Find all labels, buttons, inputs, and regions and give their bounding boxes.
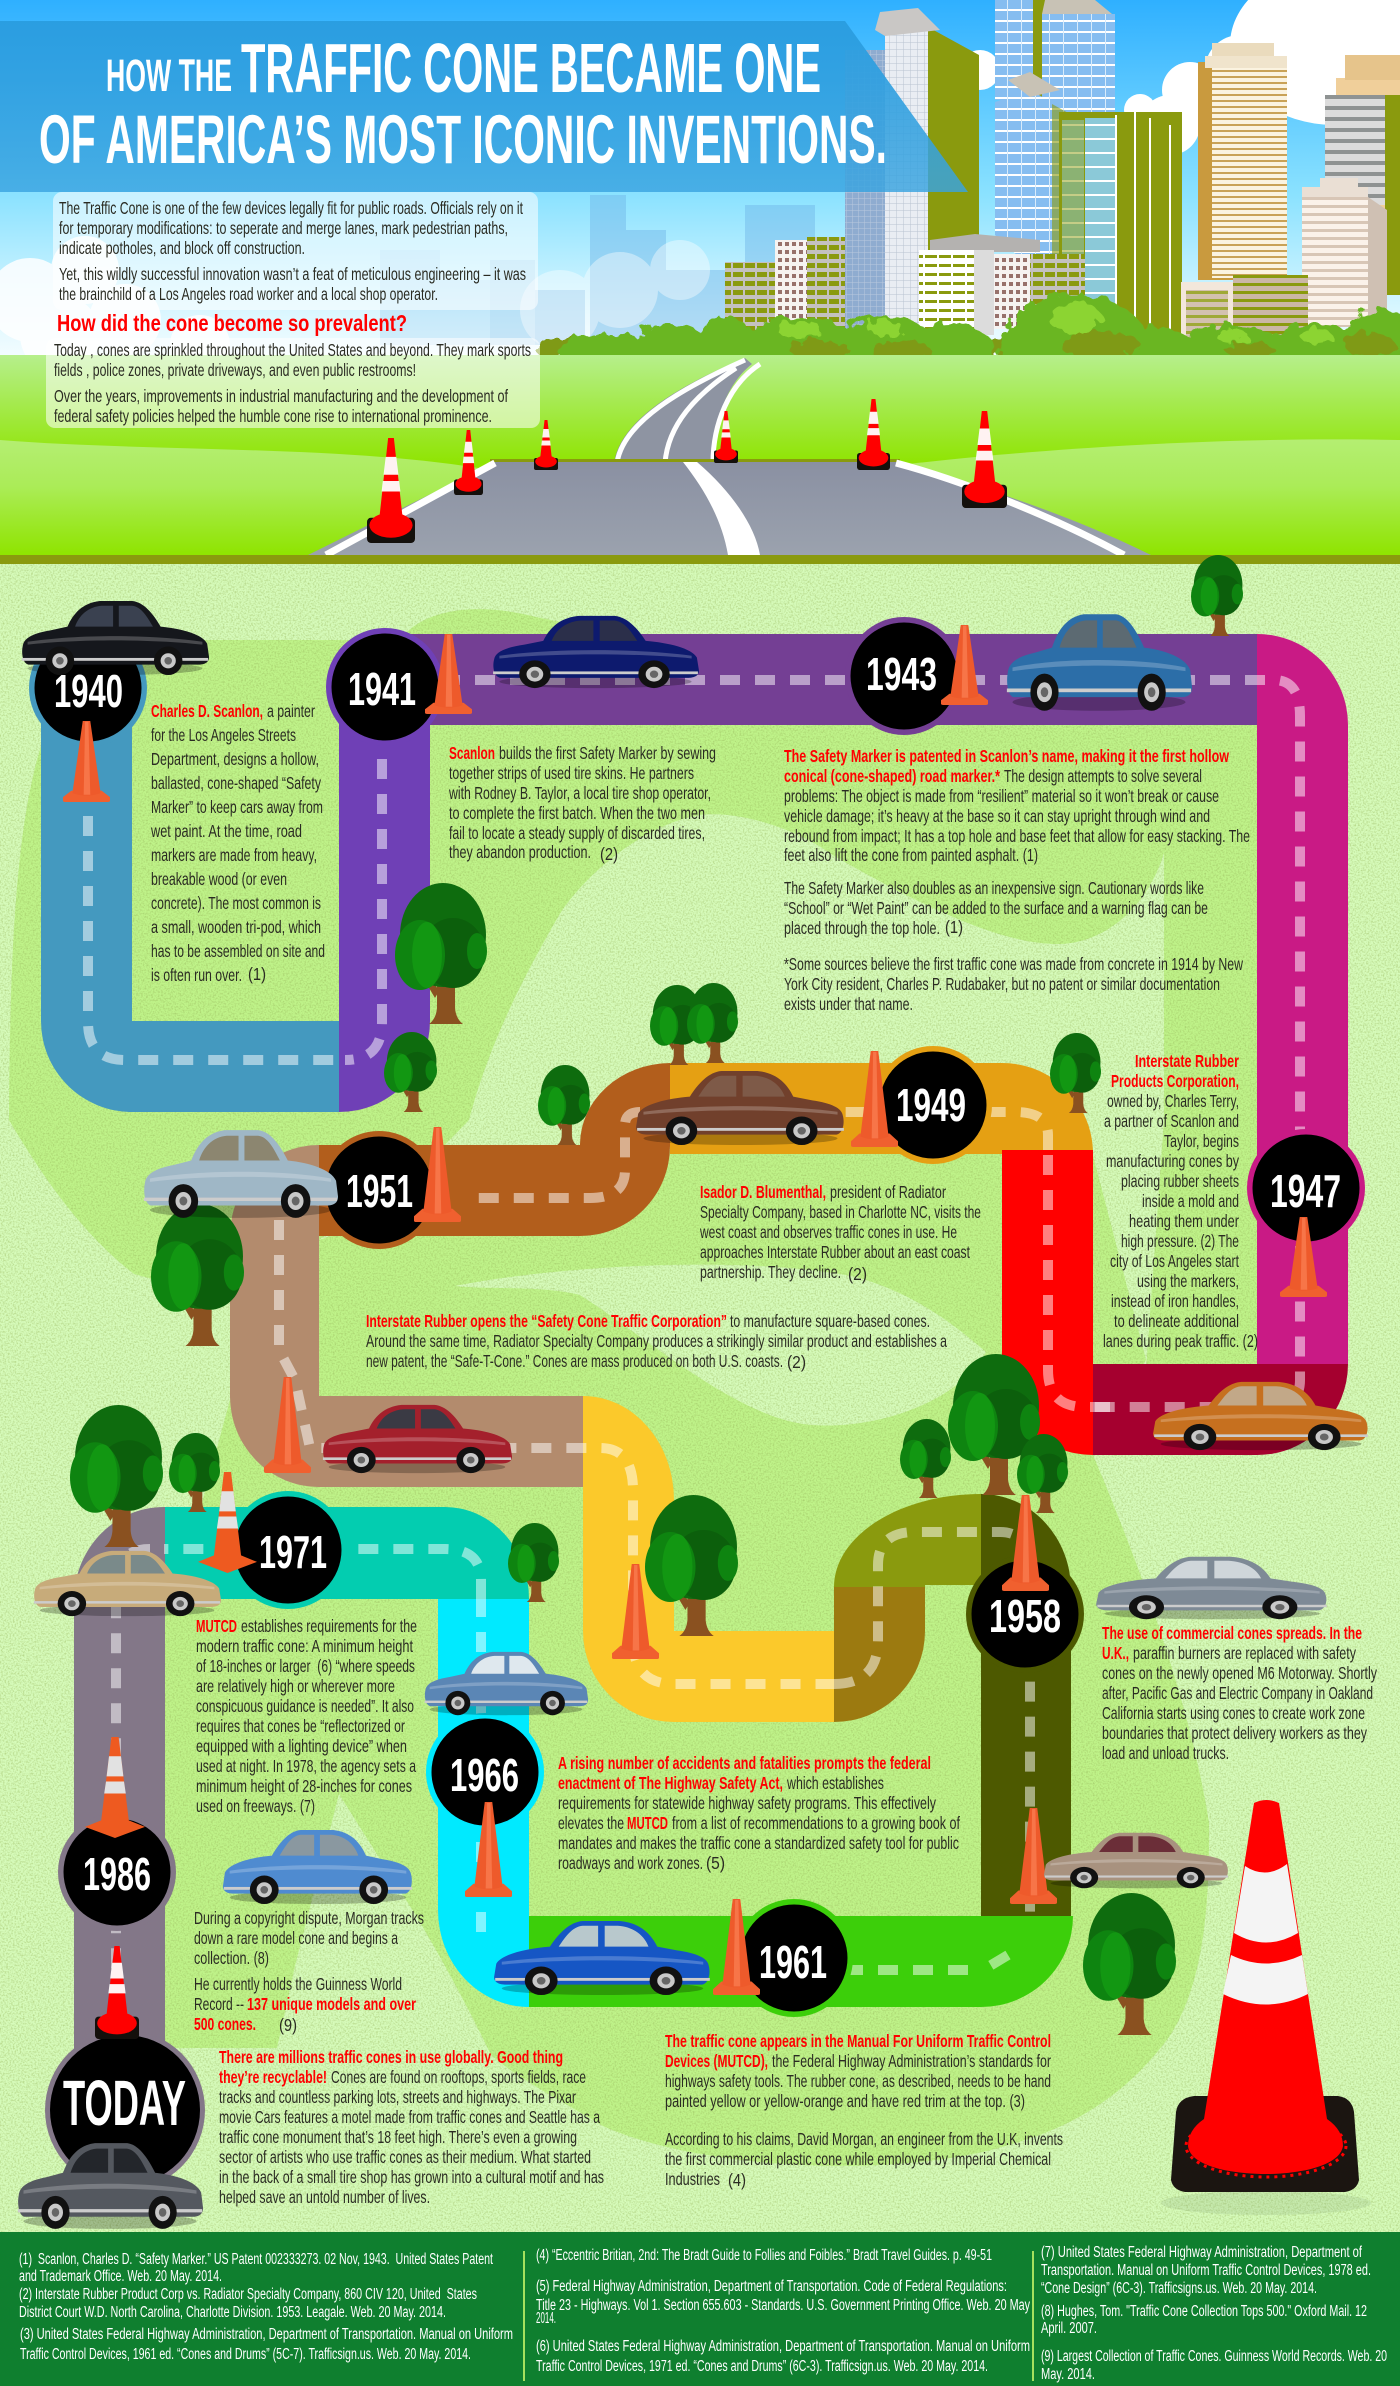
text: today millions of cones: in the back of a small tire shop has grown into a cultural motif and has: [219, 2167, 604, 2187]
road: 1951 segment: [319, 1063, 670, 1236]
car: 1951 light blue sedan: [144, 1130, 338, 1218]
text: 1961 Manual for Uniform Traffic Control Devices: the Federal Highway Administration’s standards for: [772, 2051, 1051, 2071]
text: 1943 Safety Marker patent: “School” or “Wet Paint” can be added to the surface and a warning flag can be: [784, 898, 1208, 918]
references column 1: [19, 2251, 513, 2363]
striped cone: 1986: [85, 1737, 145, 1838]
text: 1941 Scanlon builds: Scanlon: [449, 743, 495, 763]
references column 1: and Trademark Office. Web. 20 May. 2014.: [19, 2268, 222, 2285]
text: 1947 Interstate Rubber Products: placing rubber sheets: [1121, 1171, 1239, 1191]
text: 1986 Morgan collection: He currently holds the Guinness World: [194, 1974, 402, 1994]
text: 1966 Highway Safety Act: enactment of The Highway Safety Act,: [558, 1773, 783, 1793]
text: 1940 Charles D. Scanlon: has to be assembled on site and: [151, 941, 325, 961]
references column 1: Traffic Control Devices, 1961 ed. “Cones and Drums” (5C-7). Trafficsign.us. Web. 20 May. 2014.: [20, 2346, 471, 2363]
text: 1947 Interstate Rubber Products: Products Corporation,: [1111, 1071, 1239, 1091]
red cone: today: [95, 1946, 139, 2039]
orange cones along the route: [63, 625, 1327, 1995]
intro box 1: the brainchild of a Los Angeles road worker and a local shop operator.: [59, 284, 438, 304]
text: 1941 Scanlon builds: [448, 743, 716, 864]
skyscrapers: [845, 0, 1400, 342]
road: 1966 segment: [438, 1599, 529, 2007]
text: 1949 Isador D. Blumenthal: president of Radiator: [830, 1182, 946, 1202]
year marker: today: TODAY: [63, 2067, 186, 2139]
text: 1940 Charles D. Scanlon: for the Los Angeles Streets: [151, 725, 296, 745]
road: red segment: [1002, 1150, 1093, 1455]
year marker: 1951: [320, 1131, 438, 1249]
text: 1966 Highway Safety Act: (5): [706, 1853, 725, 1873]
text: 1943 Safety Marker patent: (1): [945, 917, 963, 937]
road: 1949 segment: [670, 1063, 1093, 1154]
year marker: 1958: 1958: [989, 1590, 1061, 1642]
intro box 1: [53, 192, 538, 310]
references column 2: Title 23 - Highways. Vol 1. Section 655.603 - Standards. U.S. Government Printing Office. Web. 20 May: [536, 2297, 1030, 2314]
text: 1941 Scanlon builds: with Rodney B. Taylor, a local tire shop operator,: [448, 783, 711, 803]
year marker: 1943: [845, 617, 963, 735]
text: today millions of cones: movie Cars features a motel made from traffic cones and Seattle has a: [219, 2107, 600, 2127]
intro box 1: Yet, this wildly successful innovation wasn’t a feat of meticulous engineering – it was: [59, 264, 526, 284]
text: 1947 Interstate Rubber Products: [1103, 1051, 1258, 1351]
text: 1951 Interstate Rubber opens: new patent, the “Safe-T-Cone.” Cones are mass produced on both U.S. coasts.: [366, 1351, 783, 1371]
text: 1943 Safety Marker patent: exists under that name.: [784, 994, 913, 1014]
big traffic cone: [1161, 1800, 1371, 2215]
road network: [41, 634, 1348, 2130]
text: 1941 Scanlon builds: builds the first Safety Marker by sewing: [499, 743, 716, 763]
text: today millions of cones: sector of artists who use traffic cones as their medium. What started: [219, 2147, 591, 2167]
intro box 1: for temporary modifications: to seperate and merge lanes, mark pedestrian paths,: [59, 218, 508, 238]
text: 1966 Highway Safety Act: from a list of recommendations to a growing book of: [672, 1813, 960, 1833]
year marker: today: [45, 2030, 205, 2190]
text: 1940 Charles D. Scanlon: a painter: [267, 701, 315, 721]
text: 1941 Scanlon builds: together strips of used tire skins. He partners: [449, 763, 694, 783]
text: 1971 MUTCD requirements: of 18-inches or larger (6) “where speeds: [196, 1656, 415, 1676]
clouds: [0, 0, 1400, 375]
text: 1966 Highway Safety Act: roadways and work zones.: [558, 1853, 703, 1873]
text: 1971 MUTCD requirements: minimum height of 28-inches for cones: [196, 1776, 412, 1796]
text: 1943 Safety Marker patent: York City resident, Charles P. Rudabaker, but no patent or similar documentation: [784, 974, 1220, 994]
text: 1971 MUTCD requirements: [196, 1616, 417, 1816]
references column 2: Traffic Control Devices, 1971 ed. “Cones and Drums” (6C-3). Trafficsign.us. Web. 20 May. 2014.: [536, 2358, 988, 2375]
text: 1961 Manual for Uniform Traffic Control Devices: According to his claims, David Morgan, an engineer from the U.K, invents: [665, 2129, 1063, 2149]
year marker: 1958: [966, 1555, 1084, 1673]
text: 1971 MUTCD requirements: requires that cones be “reflectorized or: [196, 1716, 405, 1736]
heading: how did the cone become so prevalent: How did the cone become so prevalent?: [57, 310, 407, 336]
year marker: 1961: [735, 1899, 853, 2017]
footer: references: [0, 2232, 1400, 2386]
text: 1971 MUTCD requirements: modern traffic cone: A minimum height: [196, 1636, 413, 1656]
text: 1940 Charles D. Scanlon: breakable wood (or even: [151, 869, 287, 889]
intro box 2: fields , police zones, private driveways, and even public restrooms!: [54, 360, 416, 380]
grass field: [0, 355, 1400, 555]
text: 1958 commercial cones spread: load and unload trucks.: [1102, 1743, 1229, 1763]
text: 1949 Isador D. Blumenthal: west coast and observes traffic cones in use. He: [699, 1222, 957, 1242]
text: 1947 Interstate Rubber Products: Taylor, begins: [1164, 1131, 1239, 1151]
text: 1986 Morgan collection: down a rare model cone and begins a: [194, 1928, 398, 1948]
text: 1947 Interstate Rubber Products: to delineate additional: [1114, 1311, 1239, 1331]
text: 1949 Isador D. Blumenthal: approaches Interstate Rubber about an east coast: [700, 1242, 970, 1262]
text: 1947 Interstate Rubber Products: a partner of Scanlon and: [1104, 1111, 1239, 1131]
trees: [70, 555, 1243, 2035]
text: today millions of cones: helped save an untold number of lives.: [219, 2187, 430, 2207]
text: 1947 Interstate Rubber Products: heating them under: [1129, 1211, 1239, 1231]
text: 1940 Charles D. Scanlon: Marker” to keep cars away from: [151, 797, 323, 817]
year marker: 1966: 1966: [450, 1749, 519, 1801]
text: 1986 Morgan collection: (9): [279, 2015, 297, 2035]
text: 1971 MUTCD requirements: used at night. In 1978, the agency sets a: [196, 1756, 416, 1776]
text: 1947 Interstate Rubber Products: instead of iron handles,: [1111, 1291, 1239, 1311]
references column 1: (1) Scanlon, Charles D. “Safety Marker.” US Patent 002333273. 02 Nov, 1943. United States Patent: [19, 2251, 493, 2268]
car: today grey sedan: [18, 2143, 203, 2229]
cone base studs: [1186, 2115, 1346, 2177]
road: [308, 358, 1151, 555]
text: 1961 Manual for Uniform Traffic Control Devices: Industries: [665, 2169, 720, 2189]
treeline bushes: [540, 294, 1400, 406]
text: 1966 Highway Safety Act: which establishes: [786, 1773, 884, 1793]
year marker: 1971: 1971: [259, 1526, 327, 1578]
text: 1949 Isador D. Blumenthal: Specialty Company, based in Charlotte NC, visits the: [700, 1202, 981, 1222]
car: 1961 blue impala: [494, 1921, 710, 1995]
year marker: 1941: [326, 628, 444, 746]
text: 1966 Highway Safety Act: MUTCD: [627, 1813, 668, 1833]
sky: [0, 0, 1400, 355]
text: 1986 Morgan collection: [194, 1908, 424, 2035]
text: 1951 Interstate Rubber opens: Around the same time, Radiator Specialty Company produces a strikingly similar product and establishes a: [366, 1331, 947, 1351]
text: 1940 Charles D. Scanlon: concrete). The most common is: [151, 893, 321, 913]
intro box 2: Over the years, improvements in industrial manufacturing and the development of: [54, 386, 508, 406]
road: 1971 segment: [164, 1507, 529, 1599]
cone stripes: [1223, 1864, 1308, 2004]
road: 1943 horizontal segment: [385, 634, 1257, 725]
low buildings: [725, 234, 1308, 350]
text: 1986 Morgan collection: 500 cones.: [194, 2014, 256, 2034]
year marker: 1947: [1247, 1129, 1365, 1247]
car: 1966 blue sedan: [425, 1652, 588, 1715]
text: 1941 Scanlon builds: to complete the first batch. When the two men: [449, 803, 705, 823]
text: 1941 Scanlon builds: fail to locate a steady supply of discarded tires,: [449, 823, 705, 843]
title: [39, 29, 887, 178]
text: 1943 Safety Marker patent: problems: The object is made from “resilient” material so it won’t break or cause: [784, 786, 1219, 806]
year marker: 1986: [58, 1813, 176, 1931]
car: station wagon: [1044, 1833, 1228, 1888]
text: 1971 MUTCD requirements: establishes requirements for the: [241, 1616, 417, 1636]
text: 1947 Interstate Rubber Products: high pressure. (2) The: [1121, 1231, 1239, 1251]
road lane dashes: [88, 680, 1300, 2040]
text: 1949 Isador D. Blumenthal: (2): [848, 1264, 867, 1284]
text: 1966 Highway Safety Act: mandates and makes the traffic cone a standardized safety tool for public: [558, 1833, 959, 1853]
year marker: 1941: 1941: [348, 663, 416, 715]
faint skyline: [380, 195, 815, 345]
text: 1986 Morgan collection: 137 unique models and over: [247, 1994, 416, 2014]
text: 1947 Interstate Rubber Products: manufacturing cones by: [1106, 1151, 1239, 1171]
road: 1941 vertical segment: [339, 687, 430, 1112]
near lawn right: [900, 439, 1400, 555]
title band: [0, 21, 968, 192]
text: 1966 Highway Safety Act: [558, 1753, 960, 1873]
text: 1940 Charles D. Scanlon: (1): [248, 964, 266, 984]
text: 1971 MUTCD requirements: equipped with a lighting device” when: [196, 1736, 407, 1756]
text: 1940 Charles D. Scanlon: Charles D. Scanlon,: [151, 701, 263, 721]
text: today millions of cones: tracks and countless parking lots, streets and highways. The Pixar: [219, 2087, 576, 2107]
text: 1971 MUTCD requirements: are relatively high or wherever more: [196, 1676, 395, 1696]
text: 1943 Safety Marker patent: placed through the top hole.: [784, 918, 940, 938]
references column 2: (4) “Eccentric Britian, 2nd: The Bradt Guide to Follies and Foibles.” Bradt Travel Guides. p. 49-51: [536, 2247, 992, 2264]
text: 1941 Scanlon builds: they abandon production.: [449, 842, 591, 862]
text: 1943 Safety Marker patent: The Safety Marker also doubles as an inexpensive sign. Cautionary words like: [784, 878, 1204, 898]
cone base: [1171, 2096, 1359, 2192]
text: 1947 Interstate Rubber Products: lanes during peak traffic. (2): [1103, 1331, 1258, 1351]
text: 1940 Charles D. Scanlon: markers are made from heavy,: [151, 845, 317, 865]
cone body: [1188, 1800, 1343, 2174]
road: olive segment: [834, 1494, 981, 1587]
text: 1943 Safety Marker patent: The Safety Marker is patented in Scanlon’s name, making it the first hollow: [784, 746, 1229, 766]
intro box 1: indicate potholes, and block off construction.: [59, 238, 305, 258]
text: 1951 Interstate Rubber opens: (2): [787, 1352, 806, 1372]
text: 1949 Isador D. Blumenthal: [699, 1182, 981, 1284]
text: 1951 Interstate Rubber opens: to manufacture square-based cones.: [730, 1311, 930, 1331]
car: 1971 tan hatchback: [34, 1551, 221, 1616]
year marker: 1943: 1943: [866, 648, 937, 700]
title: HOW THE: [106, 50, 232, 101]
text: 1947 Interstate Rubber Products: inside a mold and: [1142, 1191, 1239, 1211]
text: 1958 commercial cones spread: U.K.,: [1102, 1643, 1129, 1663]
year marker: 1951: 1951: [346, 1165, 413, 1217]
text: today millions of cones: [219, 2047, 604, 2207]
near lawn left: [0, 440, 490, 555]
road: ochre segment: [834, 1587, 925, 1722]
road: 1986 segment: [74, 1507, 165, 2130]
text: 1961 Manual for Uniform Traffic Control Devices: painted yellow or yellow-orange and have red trim at the top. (3): [665, 2091, 1025, 2111]
text: 1940 Charles D. Scanlon: a small, wooden tri-pod, which: [151, 917, 321, 937]
car: 1947 orange convertible: [1153, 1382, 1368, 1450]
text: 1940 Charles D. Scanlon: [150, 701, 325, 985]
striped cone: 1971: [198, 1472, 257, 1573]
road: 1940 segment: [41, 690, 339, 1112]
year marker: 1961: 1961: [759, 1936, 827, 1988]
road: crimson segment: [1093, 1364, 1348, 1455]
text: today millions of cones: There are millions traffic cones in use globally. Good thing: [219, 2047, 563, 2067]
year marker: 1966: [426, 1713, 544, 1831]
header scene: [0, 0, 1400, 564]
road: yellow segment: [583, 1396, 834, 1722]
references column 1: (2) Interstate Rubber Product Corp vs. Radiator Specialty Company, 860 CIV 120, United States: [19, 2286, 477, 2303]
text: 1958 commercial cones spread: [1102, 1623, 1377, 1763]
text: 1947 Interstate Rubber Products: owned by, Charles Terry,: [1107, 1091, 1239, 1111]
car: red sports car: [323, 1405, 512, 1473]
text: 1940 Charles D. Scanlon: wet paint. At the time, road: [150, 821, 302, 841]
text: 1966 Highway Safety Act: elevates the: [558, 1813, 624, 1833]
olive divider: [0, 555, 1400, 564]
text: 1986 Morgan collection: Record --: [194, 1994, 244, 2014]
references column 3: April. 2007.: [1041, 2320, 1097, 2337]
text: 1961 Manual for Uniform Traffic Control Devices: [665, 2031, 1063, 2190]
text: 1943 Safety Marker patent: The design attempts to solve several: [1004, 766, 1202, 786]
text: 1986 Morgan collection: collection. (8): [194, 1948, 269, 1968]
text: 1947 Interstate Rubber Products: using the markers,: [1137, 1271, 1239, 1291]
text: 1949 Isador D. Blumenthal: partnership. They decline.: [700, 1262, 841, 1282]
text: 1951 Interstate Rubber opens: Interstate Rubber opens the “Safety Cone Traffic Corporation”: [366, 1311, 727, 1331]
references column 2: 2014.: [536, 2310, 556, 2327]
text: 1961 Manual for Uniform Traffic Control Devices: the first commercial plastic cone while employed by Imperial Chemical: [665, 2149, 1051, 2169]
text: 1966 Highway Safety Act: A rising number of accidents and fatalities prompts the federal: [558, 1753, 931, 1773]
text: 1943 Safety Marker patent: feet also lift the cone from painted asphalt. (1): [784, 845, 1038, 865]
text: today millions of cones: they’re recyclable!: [219, 2067, 327, 2087]
text: 1943 Safety Marker patent: conical (cone-shaped) road marker.*: [784, 766, 1000, 786]
roadside cones: [367, 399, 1007, 543]
year marker: 1971: [229, 1491, 347, 1609]
car: 1940 black sedan: [22, 601, 209, 675]
text: 1966 Highway Safety Act: requirements for statewide highway safety programs. This effectively: [558, 1793, 936, 1813]
text: 1949 Isador D. Blumenthal: Isador D. Blumenthal,: [700, 1182, 826, 1202]
road: magenta segment: [1257, 634, 1348, 1364]
references column 3: [1041, 2244, 1387, 2383]
intro box 2: Today , cones are sprinkled throughout the United States and beyond. They mark sports: [54, 340, 531, 360]
title: TRAFFIC CONE BECAME ONE: [241, 29, 821, 107]
intro box 2: federal safety policies helped the humble cone rise to international prominence.: [54, 406, 492, 426]
text: 1947 Interstate Rubber Products: city of Los Angeles start: [1110, 1251, 1239, 1271]
text: 1941 Scanlon builds: (2): [600, 844, 618, 864]
car: 1986 blue coupe: [223, 1830, 412, 1904]
text: 1971 MUTCD requirements: used on freeways. (7): [196, 1796, 315, 1816]
car: 1943 blue coupe: [1007, 614, 1192, 711]
car: 1941 navy coupe: [493, 616, 699, 688]
timeline background: [0, 564, 1400, 2232]
road: 1961 segment: [529, 1916, 1073, 2007]
year marker: 1949: [874, 1046, 992, 1164]
text: 1943 Safety Marker patent: [784, 746, 1250, 1014]
text: 1943 Safety Marker patent: vehicle damage; it’s heavy at the base so it can stay upright through wind and: [784, 806, 1210, 826]
text: 1940 Charles D. Scanlon: is often run over.: [151, 965, 242, 985]
car: 1949 brown coupe: [636, 1071, 844, 1145]
road: tan segment: [230, 1145, 583, 1487]
year marker: 1940: 1940: [54, 665, 123, 717]
text: 1961 Manual for Uniform Traffic Control Devices: highways safety tools. The rubber cone, as described, needs to be hand: [665, 2071, 1051, 2091]
year marker: 1986: 1986: [83, 1848, 151, 1900]
cone shadow: [1161, 2191, 1371, 2215]
text: 1961 Manual for Uniform Traffic Control Devices: Devices (MUTCD),: [665, 2051, 768, 2071]
text: 1947 Interstate Rubber Products: Interstate Rubber: [1135, 1051, 1239, 1071]
references column 2: [536, 2247, 1030, 2375]
references column 2: (6) United States Federal Highway Administration, Department of Transportation. Manual on Uniform: [536, 2338, 1030, 2355]
text: 1986 Morgan collection: During a copyright dispute, Morgan tracks: [194, 1908, 424, 1928]
text: 1940 Charles D. Scanlon: ballasted, cone-shaped “Safety: [151, 773, 321, 793]
text: today millions of cones: Cones are found on rooftops, sports fields, race: [331, 2067, 586, 2087]
intro box 2: [46, 338, 540, 428]
year marker: 1949: 1949: [896, 1079, 966, 1131]
text: 1971 MUTCD requirements: conspicuous guidance is needed”. It also: [196, 1696, 414, 1716]
references column 2: (5) Federal Highway Administration, Department of Transportation. Code of Federal Regulations:: [536, 2278, 1007, 2295]
text: 1971 MUTCD requirements: MUTCD: [196, 1616, 237, 1636]
text: 1961 Manual for Uniform Traffic Control Devices: (4): [728, 2170, 746, 2190]
car: 1958 silver cadillac: [1096, 1557, 1327, 1619]
text: 1961 Manual for Uniform Traffic Control Devices: The traffic cone appears in the Manual For Uniform Traffic Control: [665, 2031, 1051, 2051]
text: 1940 Charles D. Scanlon: Department, designs a hollow,: [151, 749, 319, 769]
references column 1: (3) United States Federal Highway Administration, Department of Transportation. Manual on Uniform: [20, 2326, 513, 2343]
year marker: 1940: [29, 629, 147, 747]
text: today millions of cones: traffic cone monument that’s 18 feet high. There’s even a growing: [219, 2127, 577, 2147]
references column 1: District Court W.D. North Carolina, Charlotte Division. 1953. Leagale. Web. 20 May. 2014.: [19, 2304, 446, 2321]
intro box 1: The Traffic Cone is one of the few devices legally fit for public roads. Officials rely on it: [59, 198, 523, 218]
text: 1951 Interstate Rubber opens: [366, 1311, 947, 1372]
year marker: 1947: 1947: [1270, 1165, 1341, 1217]
road: 1958 segment: [981, 1494, 1071, 1916]
references column 3: May. 2014.: [1041, 2366, 1095, 2383]
